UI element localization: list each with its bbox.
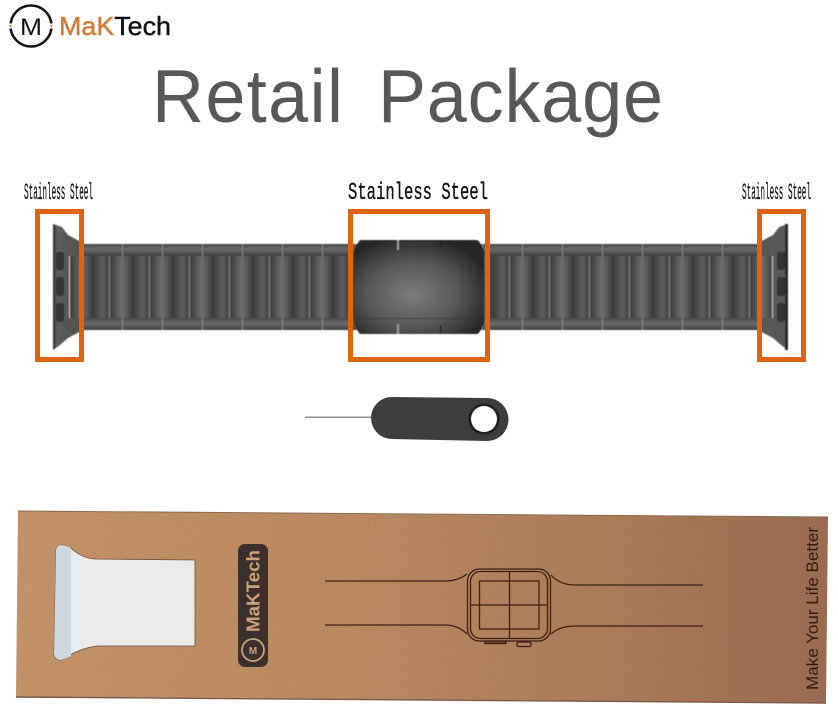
- box brand tag: MaKTech: [244, 550, 264, 632]
- watch band: [53, 224, 788, 350]
- icon: SIM eject tool: [305, 397, 508, 441]
- title: Package: [378, 55, 663, 138]
- box window: [54, 545, 195, 660]
- infographic canvas: Stainless Steel: [24, 180, 93, 206]
- logo: MaKTech: MaKTech: [59, 11, 171, 41]
- logo: MaKTech: [8, 6, 171, 46]
- left connector lug: [53, 224, 83, 350]
- logo: MaKTech: M: [20, 14, 42, 41]
- retail box: [16, 511, 828, 703]
- box brand tag: [238, 544, 268, 667]
- title: [152, 55, 663, 138]
- right connector lug: [758, 224, 788, 350]
- clasp: [354, 240, 484, 334]
- title: Retail: [152, 55, 343, 138]
- highlight box: left: [38, 212, 82, 360]
- box brand tag: M: [249, 646, 257, 657]
- box slogan: Make Your Life Better: [803, 527, 822, 690]
- highlight box: right: [760, 212, 804, 360]
- watch line drawing: [325, 569, 703, 646]
- label: center stainless steel: Stainless Steel: [348, 180, 488, 207]
- highlight box: center: [350, 212, 488, 360]
